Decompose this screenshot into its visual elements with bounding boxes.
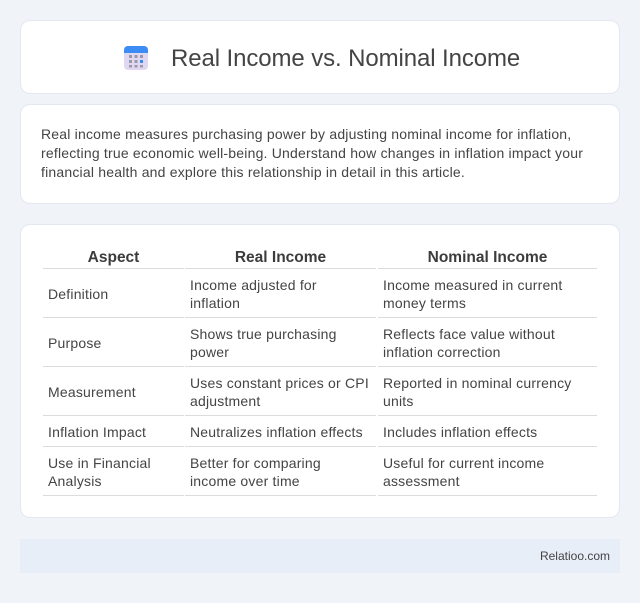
row: purpose: Reflects face value without xyxy=(383,326,555,342)
footer text: Relatioo.com xyxy=(540,549,610,563)
icon: calendar xyxy=(124,46,148,70)
row: definition: Income adjusted for xyxy=(190,277,317,293)
row: use in financial analysis: income over time xyxy=(190,473,300,489)
row: definition: Definition xyxy=(48,286,108,302)
row: measurement xyxy=(48,375,572,409)
row: measurement: adjustment xyxy=(190,393,260,409)
title: Real Income vs. Nominal Income xyxy=(171,45,520,72)
row: use in financial analysis: Better for comparing xyxy=(190,455,321,471)
text block: intro xyxy=(41,126,583,180)
row: measurement: Measurement xyxy=(48,384,136,400)
row: definition: money terms xyxy=(383,295,466,311)
table header: Aspect xyxy=(88,249,139,266)
row: definition: inflation xyxy=(190,295,240,311)
table header: Nominal Income xyxy=(428,249,547,266)
row: measurement: Uses constant prices or CPI xyxy=(190,375,369,391)
row: measurement: units xyxy=(383,393,414,409)
panel: comparison table xyxy=(20,224,620,518)
row: use in financial analysis xyxy=(48,455,544,489)
row: inflation impact xyxy=(48,424,537,440)
text block: intro: reflecting true economic well-being. Understand how changes in inflation impact your xyxy=(41,145,583,161)
row: use in financial analysis: Analysis xyxy=(48,473,102,489)
row: definition: Income measured in current xyxy=(383,277,563,293)
row: purpose: inflation correction xyxy=(383,344,501,360)
panel: title card xyxy=(20,20,620,94)
row: inflation impact: Includes inflation effects xyxy=(383,424,537,440)
panel: intro text xyxy=(20,104,620,204)
row: inflation impact: Inflation Impact xyxy=(48,424,146,440)
row: inflation impact: Neutralizes inflation effects xyxy=(190,424,363,440)
table header: Real Income xyxy=(235,249,326,266)
row: measurement: Reported in nominal currency xyxy=(383,375,571,391)
row: use in financial analysis: assessment xyxy=(383,473,460,489)
row: purpose: Shows true purchasing xyxy=(190,326,337,342)
row: use in financial analysis: Useful for current income xyxy=(383,455,544,471)
footer bar xyxy=(20,539,620,573)
row: definition xyxy=(48,277,563,311)
row: use in financial analysis: Use in Financial xyxy=(48,455,151,471)
text block: intro: financial health and explore this relationship in detail in this article. xyxy=(41,164,465,180)
row: purpose xyxy=(48,326,555,360)
table header xyxy=(88,249,547,266)
row: purpose: Purpose xyxy=(48,335,102,351)
row: purpose: power xyxy=(190,344,229,360)
text block: intro: Real income measures purchasing power by adjusting nominal income for inflation, xyxy=(41,126,571,142)
